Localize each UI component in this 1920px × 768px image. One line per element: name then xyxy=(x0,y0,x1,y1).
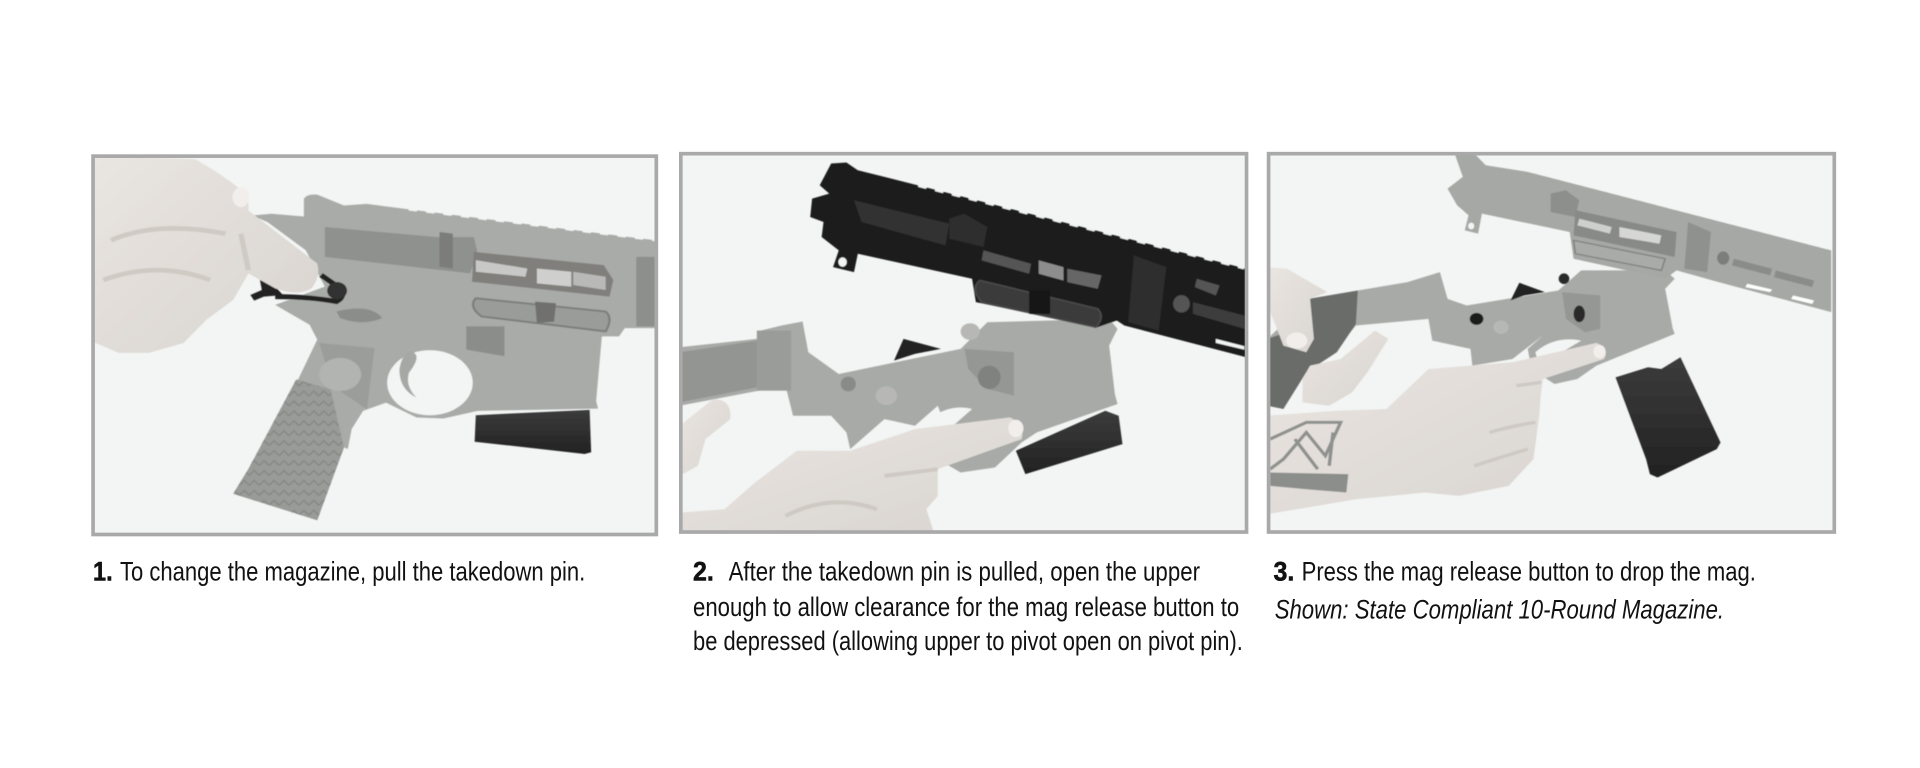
panel: step 3 photo xyxy=(1267,154,1834,532)
hammer xyxy=(894,339,941,361)
caption: step 1: To change the magazine, pull the takedown pin. xyxy=(120,556,585,586)
gray upper receiver xyxy=(1448,154,1831,312)
lower receiver and stock xyxy=(680,319,1118,473)
takedown pin xyxy=(250,275,347,302)
hand pulling pin xyxy=(92,156,318,353)
caption: step 3: Press the mag release button to drop the mag. xyxy=(1302,556,1756,586)
caption: step 2: be depressed (allowing upper to pivot open on pivot pin). xyxy=(693,626,1243,656)
caption: step 2: enough to allow clearance for the mag release button to xyxy=(693,592,1239,622)
caption: step 3: 3. xyxy=(1273,556,1294,586)
black upper receiver xyxy=(810,163,1246,357)
magazine xyxy=(1016,411,1122,474)
caption: step 2: After the takedown pin is pulled, open the upper xyxy=(729,556,1200,586)
panel 1 frame xyxy=(93,156,656,534)
caption: step 3 xyxy=(1273,556,1756,624)
hammer and pivot pin xyxy=(1511,273,1569,300)
hand pressing release xyxy=(680,417,1023,533)
dropped magazine xyxy=(1616,357,1721,478)
forearm and hand pressing release xyxy=(1267,343,1606,514)
panel: step 1 photo xyxy=(92,156,656,534)
panel 2 frame xyxy=(681,154,1247,532)
caption: step 2: 2. xyxy=(693,556,714,586)
caption: step 2 xyxy=(693,556,1243,656)
instruction graphic xyxy=(91,152,1836,656)
magazine xyxy=(475,410,591,454)
panel: step 2 photo xyxy=(680,154,1247,533)
panel 3 frame xyxy=(1269,154,1834,532)
tattoo xyxy=(1270,422,1348,493)
rifle receiver, pulled-pin view xyxy=(233,195,655,520)
rear hand fingers xyxy=(680,399,730,476)
rear hand fingers xyxy=(1302,331,1388,406)
caption: step 1: 1. xyxy=(93,556,113,586)
rear hand on grip xyxy=(1267,267,1327,352)
lower receiver and stock xyxy=(1267,270,1675,409)
caption: step 3: Shown: State Compliant 10-Round Magazine. xyxy=(1275,594,1724,624)
